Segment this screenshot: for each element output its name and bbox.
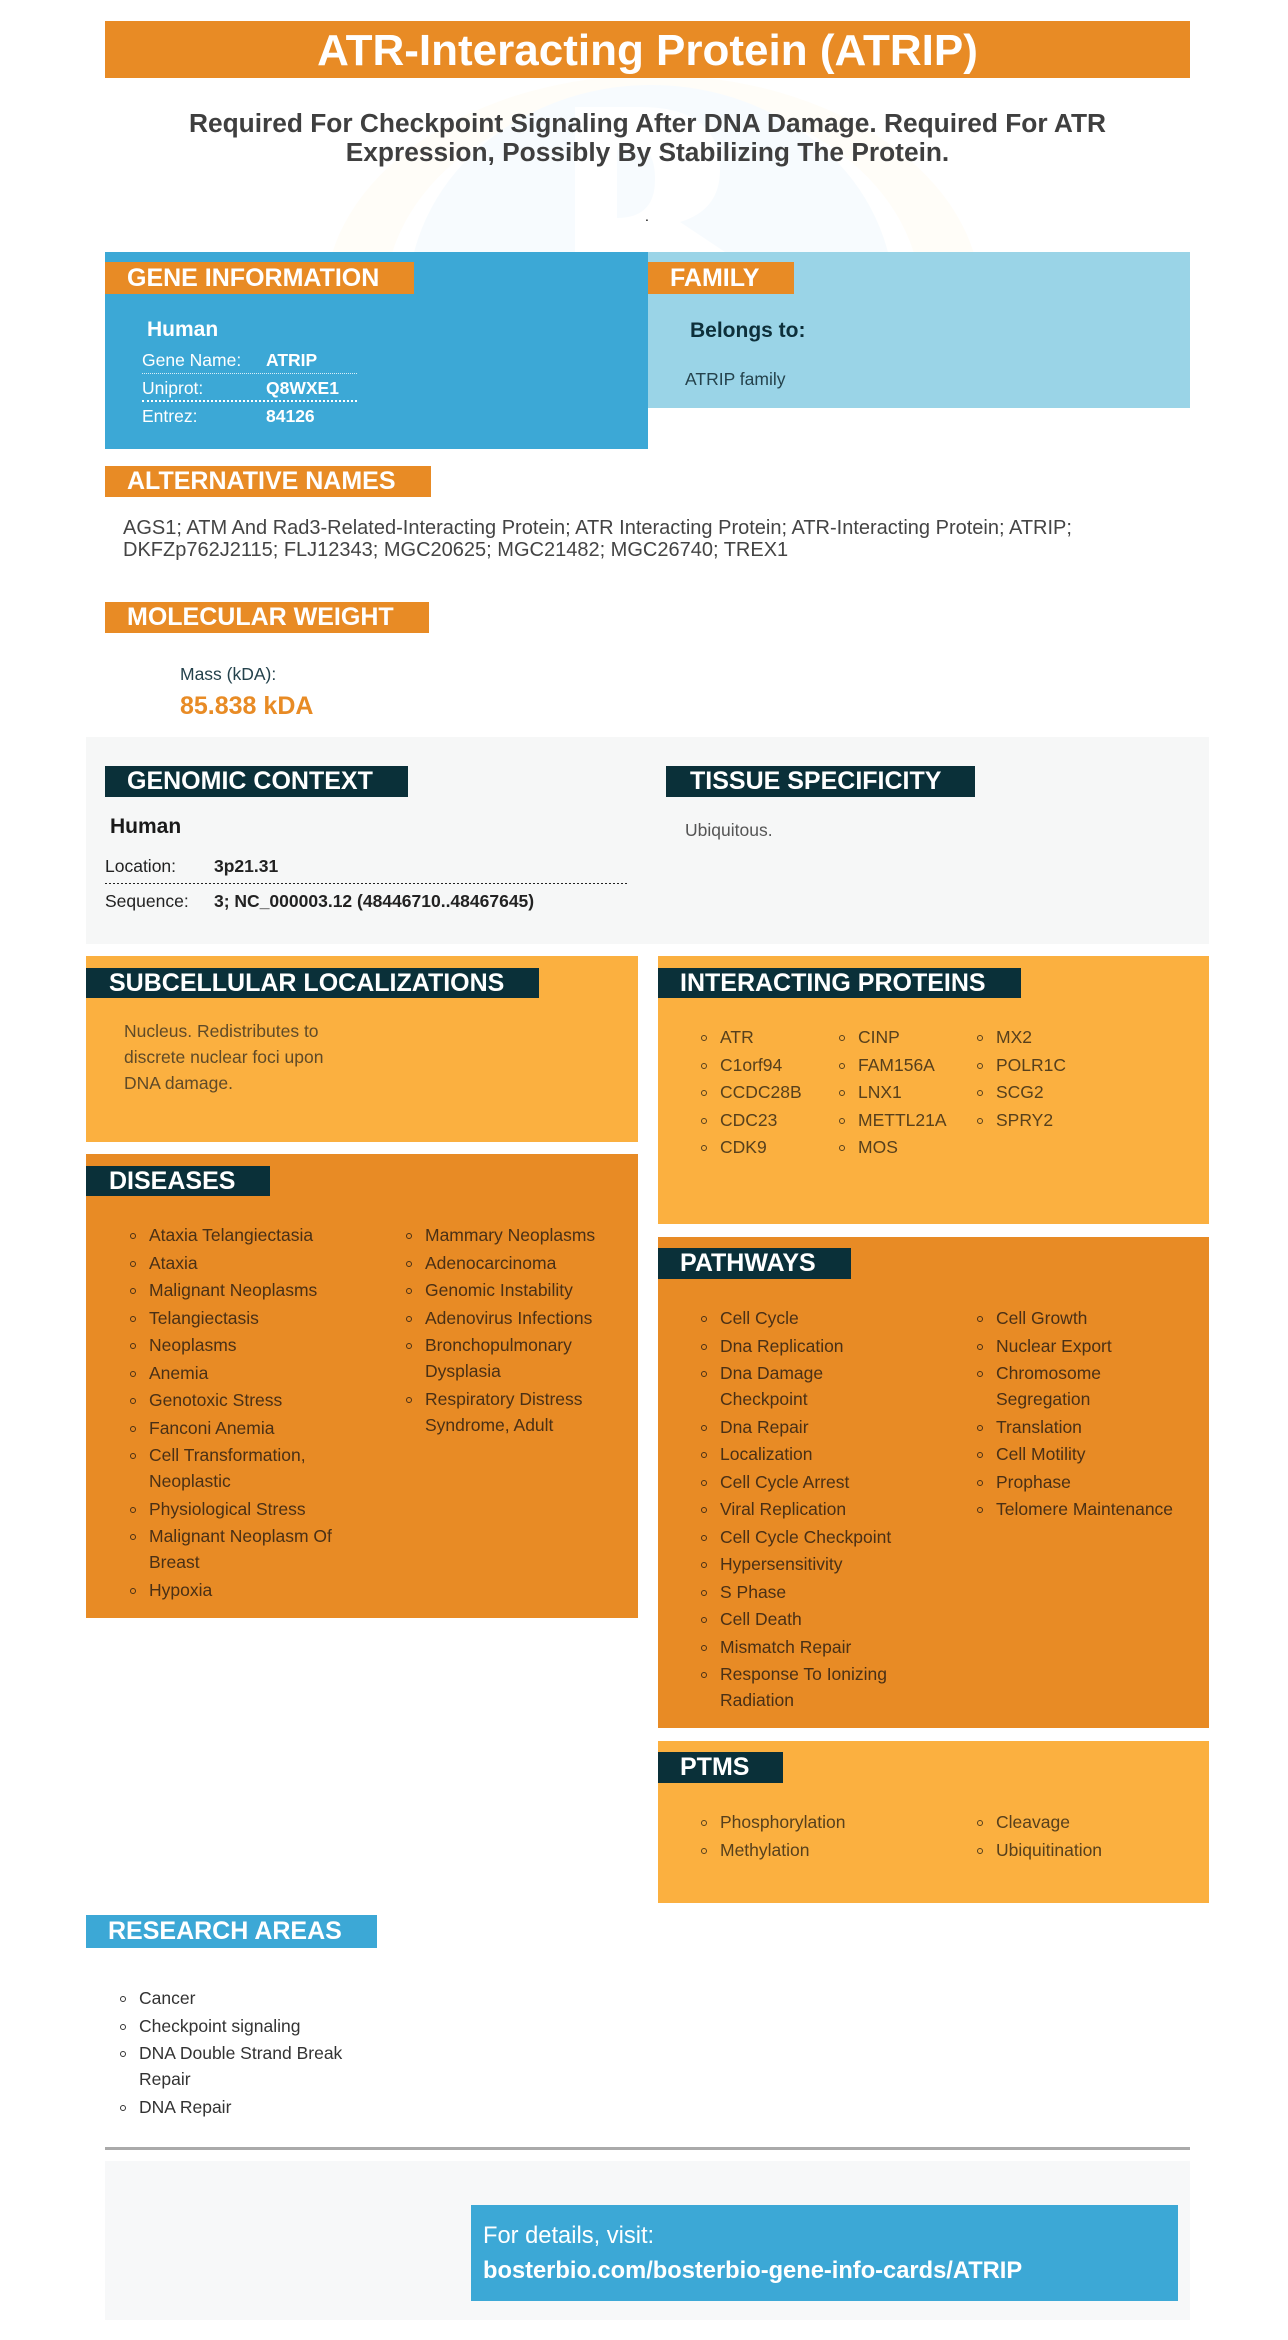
panel: gene information [105, 252, 648, 449]
subtitle: Expression, Possibly By Stabilizing The Protein. [346, 137, 949, 167]
location row: Location: [105, 856, 176, 876]
ptms list column 2: Ubiquitination [996, 1840, 1102, 1860]
diseases list column 2: Respiratory Distress [425, 1388, 583, 1408]
pathways list column 1: S Phase [720, 1582, 786, 1602]
gene details table: 84126 [266, 406, 315, 426]
localization text: discrete nuclear foci upon [124, 1047, 323, 1067]
belongs to label: Belongs to: [690, 319, 806, 342]
diseases list column 2: Syndrome, Adult [425, 1414, 553, 1434]
proteins list column 1: C1orf94 [720, 1054, 782, 1074]
pathways list column 2: Segregation [996, 1389, 1090, 1409]
heading: interacting proteins: INTERACTING PROTEINS [680, 969, 986, 997]
research areas list: Cancer [139, 1988, 195, 2008]
proteins list column 2: CINP [858, 1027, 900, 1047]
diseases list column 1: Cell Transformation, [149, 1445, 306, 1465]
callout url: bosterbio.com/bosterbio-gene-info-cards/ATRIP [483, 2258, 1022, 2284]
pathways list column 1: Viral Replication [720, 1499, 846, 1519]
proteins list column 3: SCG2 [996, 1082, 1044, 1102]
heading: gene information: GENE INFORMATION [127, 264, 379, 292]
proteins list column 1: CCDC28B [720, 1082, 802, 1102]
panel: family [648, 252, 1190, 408]
location row: 3p21.31 [214, 856, 278, 876]
watermark logo [0, 78, 1288, 252]
panel: interacting proteins [658, 956, 1209, 1224]
pathways list column 1: Hypersensitivity [720, 1554, 843, 1574]
heading: molecular weight: MOLECULAR WEIGHT [127, 603, 394, 631]
diseases list column 1: Neoplasms [149, 1335, 237, 1355]
proteins list column 3: SPRY2 [996, 1110, 1053, 1130]
heading: subcellular localizations: SUBCELLULAR LOCALIZATIONS [109, 969, 504, 997]
pathways list column 1: Dna Damage [720, 1363, 823, 1383]
diseases list column 1: Breast [149, 1552, 200, 1572]
gene details table: Q8WXE1 [266, 378, 339, 398]
localization text [124, 1021, 323, 1093]
gene details table [142, 350, 357, 426]
proteins list column 2: METTL21A [858, 1110, 946, 1130]
location row [105, 854, 629, 884]
panel: genomic context and tissue specificity: 3; NC_000003.12 (48446710..48467645) [214, 891, 534, 911]
panel: ptms [658, 1741, 1209, 1903]
pathways list column 1: Cell Cycle [720, 1308, 799, 1328]
diseases list column 1: Anemia [149, 1362, 208, 1382]
panel: pathways [658, 1237, 1209, 1728]
diseases list column 1 [130, 1225, 332, 1600]
proteins list column 1 [701, 1027, 802, 1157]
research areas list [120, 1988, 342, 2116]
ptms list column 1: Methylation [720, 1840, 810, 1860]
diseases list column 1: Malignant Neoplasm Of [149, 1526, 332, 1546]
pathways list column 1: Cell Cycle Arrest [720, 1472, 849, 1492]
pathways list column 2 [977, 1308, 1173, 1519]
heading: research areas: RESEARCH AREAS [108, 1917, 342, 1945]
heading: pathways [658, 1248, 851, 1279]
diseases list column 1: Ataxia Telangiectasia [149, 1225, 313, 1245]
diseases list column 1: Malignant Neoplasms [149, 1280, 317, 1300]
proteins list column 3 [977, 1027, 1066, 1130]
title: ATR-Interacting Protein (ATRIP) [317, 26, 978, 75]
diseases list column 2: Adenovirus Infections [425, 1308, 592, 1328]
pathways list column 2: Cell Motility [996, 1444, 1085, 1464]
pathways list column 1: Localization [720, 1444, 812, 1464]
alternative names text: DKFZp762J2115; FLJ12343; MGC20625; MGC21482; MGC26740; TREX1 [123, 539, 788, 561]
heading: alternative names: ALTERNATIVE NAMES [127, 467, 396, 495]
family value: ATRIP family [685, 369, 785, 389]
alternative names text: AGS1; ATM And Rad3-Related-Interacting Protein; ATR Interacting Protein; ATR-Interacting Protein; ATRIP; [123, 517, 1072, 539]
diseases list column 2 [406, 1225, 595, 1434]
diseases list column 1: Hypoxia [149, 1580, 212, 1600]
heading: ptms [658, 1752, 783, 1783]
gene details table: Uniprot: [142, 378, 203, 398]
subtitle [189, 108, 1106, 167]
panel: subcellular localizations [86, 956, 638, 1142]
proteins list column 2: LNX1 [858, 1082, 902, 1102]
diseases list column 2: Bronchopulmonary [425, 1335, 572, 1355]
dot mark: . [645, 208, 649, 224]
diseases list column 2: Dysplasia [425, 1361, 501, 1381]
diseases list column 1: Physiological Stress [149, 1498, 306, 1518]
mass value: 85.838 kDA [180, 692, 313, 720]
diseases list column 1: Genotoxic Stress [149, 1390, 282, 1410]
pathways list column 1: Response To Ionizing [720, 1664, 887, 1684]
species label: Human [110, 815, 181, 838]
subtitle: Required For Checkpoint Signaling After DNA Damage. Required For ATR [189, 108, 1106, 138]
proteins list column 2 [839, 1027, 946, 1157]
pathways list column 2: Cell Growth [996, 1308, 1087, 1328]
pathways list column 1 [701, 1308, 892, 1710]
pathways list column 1: Mismatch Repair [720, 1636, 851, 1656]
mass label: Mass (kDA): [180, 664, 276, 684]
pathways list column 1: Radiation [720, 1690, 794, 1710]
pathways list column 2: Telomere Maintenance [996, 1499, 1173, 1519]
proteins list column 1: ATR [720, 1027, 754, 1047]
ptms list column 1 [701, 1812, 846, 1860]
proteins list column 1: CDK9 [720, 1137, 767, 1157]
sequence row: Sequence: [105, 891, 189, 911]
diseases list column 1: Neoplastic [149, 1471, 231, 1491]
research areas list: DNA Double Strand Break [139, 2043, 342, 2063]
heading: genomic context: GENOMIC CONTEXT [127, 767, 373, 795]
gene details table: Gene Name: [142, 350, 241, 370]
heading: family [648, 262, 794, 294]
proteins list column 2: FAM156A [858, 1054, 935, 1074]
callout: details link [471, 2205, 1178, 2301]
diseases list column 1: Fanconi Anemia [149, 1418, 274, 1438]
heading: diseases: DISEASES [109, 1167, 235, 1195]
proteins list column 3: POLR1C [996, 1054, 1066, 1074]
sequence row [105, 891, 534, 911]
pathways list column 2: Prophase [996, 1472, 1071, 1492]
heading: ptms: PTMS [680, 1753, 749, 1781]
ptms list column 2 [977, 1812, 1102, 1860]
research areas list: Checkpoint signaling [139, 2016, 300, 2036]
heading: diseases [86, 1166, 270, 1196]
pathways list column 1: Dna Replication [720, 1336, 844, 1356]
pathways list column 2: Translation [996, 1416, 1082, 1436]
proteins list column 2: MOS [858, 1137, 898, 1157]
gene details table: ATRIP [266, 350, 317, 370]
diseases list column 2: Mammary Neoplasms [425, 1225, 595, 1245]
panel: genomic context and tissue specificity [86, 737, 1209, 944]
diseases list column 2: Genomic Instability [425, 1280, 573, 1300]
pathways list column 2: Nuclear Export [996, 1336, 1112, 1356]
research areas list: DNA Repair [139, 2096, 231, 2116]
pathways list column 2: Chromosome [996, 1363, 1101, 1383]
diseases list column 1: Ataxia [149, 1252, 198, 1272]
pathways list column 1: Dna Repair [720, 1416, 809, 1436]
proteins list column 1: CDC23 [720, 1110, 777, 1130]
heading: research areas [86, 1915, 377, 1948]
tissue text: Ubiquitous. [685, 820, 773, 840]
ptms list column 2: Cleavage [996, 1812, 1070, 1832]
panel: diseases [86, 1154, 638, 1618]
species label: Human [147, 318, 218, 341]
diseases list column 2: Adenocarcinoma [425, 1252, 556, 1272]
alternative names text [123, 517, 1072, 561]
research areas list: Repair [139, 2069, 191, 2089]
pathways list column 1: Checkpoint [720, 1389, 808, 1409]
localization text: DNA damage. [124, 1073, 233, 1093]
proteins list column 3: MX2 [996, 1027, 1032, 1047]
pathways list column 1: Cell Death [720, 1609, 802, 1629]
localization text: Nucleus. Redistributes to [124, 1021, 319, 1041]
title [105, 21, 1190, 78]
heading: pathways: PATHWAYS [680, 1249, 816, 1277]
callout text: For details, visit: [483, 2223, 654, 2249]
gene details table: Entrez: [142, 406, 197, 426]
panel: footer [105, 2161, 1190, 2320]
heading: tissue specificity: TISSUE SPECIFICITY [690, 767, 941, 795]
heading: family: FAMILY [670, 264, 759, 292]
ptms list column 1: Phosphorylation [720, 1812, 846, 1832]
diseases list column 1: Telangiectasis [149, 1308, 259, 1328]
pathways list column 1: Cell Cycle Checkpoint [720, 1526, 891, 1546]
